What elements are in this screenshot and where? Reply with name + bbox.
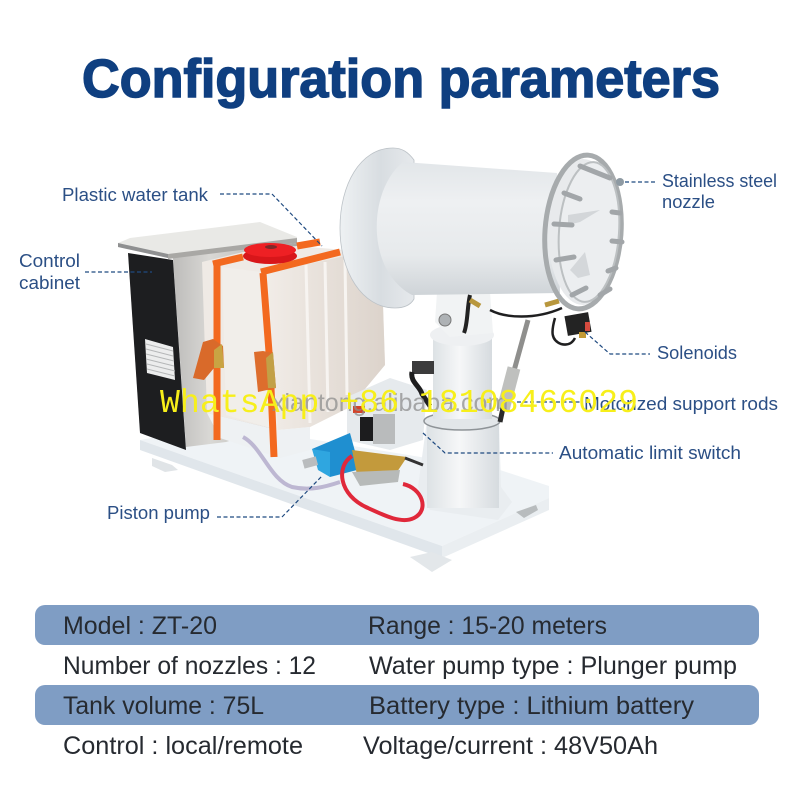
label: control cabinet: cabinet bbox=[19, 273, 80, 293]
range: Range : 15-20 meters bbox=[368, 612, 607, 640]
vent bbox=[145, 339, 175, 380]
label: control cabinet bbox=[19, 251, 80, 293]
label: solenoids: Solenoids bbox=[657, 343, 737, 363]
control: Control : local/remote bbox=[63, 732, 303, 760]
red hose bbox=[342, 456, 423, 520]
pedestal column bbox=[418, 292, 512, 520]
label: stainless steel nozzle: nozzle bbox=[662, 192, 715, 212]
number of nozzles: Number of nozzles : 12 bbox=[63, 652, 316, 680]
cap bbox=[243, 248, 297, 264]
dashed leader lines bbox=[85, 182, 655, 517]
label: motorized support rods: Motorized support rods bbox=[584, 394, 778, 414]
machine illustration bbox=[118, 148, 626, 572]
black switch bbox=[412, 361, 434, 406]
parameter table bbox=[35, 605, 759, 760]
water tank bbox=[193, 242, 385, 458]
cannon bbox=[340, 148, 626, 345]
ratchets bbox=[193, 339, 224, 380]
flange bbox=[340, 148, 414, 308]
roof bbox=[118, 222, 297, 258]
model: Model : ZT-20 bbox=[63, 612, 217, 640]
nozzles bbox=[554, 166, 622, 295]
whatsapp watermark: WhatsApp +86 18108466029 bbox=[160, 385, 638, 422]
hoses under barrel bbox=[490, 308, 575, 345]
solenoid bbox=[564, 312, 592, 338]
label: stainless steel nozzle bbox=[662, 171, 777, 212]
control cabinet bbox=[118, 222, 297, 450]
piston pump bbox=[302, 414, 423, 486]
tank volume: Tank volume : 75L bbox=[63, 692, 264, 720]
motorized support rod bbox=[500, 320, 528, 422]
title: Configuration parameters bbox=[82, 49, 720, 109]
barrel bbox=[377, 162, 560, 295]
secondary white housing bbox=[347, 378, 427, 450]
label: piston pump: Piston pump bbox=[107, 503, 210, 523]
label: plastic water tank: Plastic water tank bbox=[62, 185, 209, 205]
straps bbox=[213, 242, 320, 440]
clear suction hose bbox=[243, 437, 340, 489]
row band 3 bbox=[35, 685, 759, 725]
grey watermark: xiantong.alibaba.com bbox=[272, 389, 508, 417]
battery type: Battery type : Lithium battery bbox=[369, 692, 695, 720]
voltage current: Voltage/current : 48V50Ah bbox=[363, 732, 658, 760]
label: automatic limit switch: Automatic limit switch bbox=[559, 443, 741, 463]
label: control cabinet: Control bbox=[19, 251, 80, 271]
base plate bbox=[140, 425, 549, 572]
row band 1 bbox=[35, 605, 759, 645]
front ring bbox=[548, 159, 618, 305]
label: stainless steel nozzle: Stainless steel bbox=[662, 171, 777, 191]
water pump type: Water pump type : Plunger pump bbox=[369, 652, 737, 680]
